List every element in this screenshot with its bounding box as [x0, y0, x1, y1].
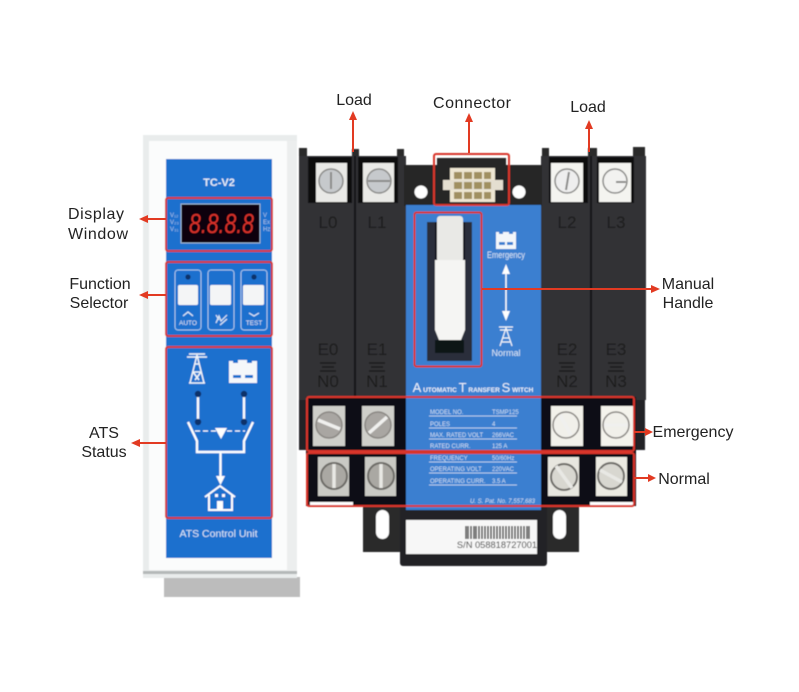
specification table: 50/60Hz: [492, 456, 514, 462]
callout: manual handle: Manual: [662, 276, 714, 293]
handle slot: [427, 216, 472, 361]
display window: 8.8.8.8: [189, 208, 254, 239]
transfer switch body: [299, 147, 646, 566]
connector housing: [404, 158, 542, 206]
barcode: [466, 526, 529, 539]
callout: manual handle: Handle: [663, 295, 713, 312]
specification table: FREQUENCY: [430, 456, 468, 462]
right terminal columns: [541, 147, 646, 450]
handle legend: Normal: [491, 348, 521, 358]
display window: Ex: [263, 220, 270, 226]
specification table: 266VAC: [492, 433, 515, 439]
mounting plate: [363, 500, 579, 566]
display window: V₂₃: [170, 220, 179, 226]
callout: normal: Normal: [658, 471, 710, 488]
specification table: RATED CURR.: [430, 444, 471, 450]
control unit: [143, 135, 300, 597]
specification table: 4: [492, 422, 496, 428]
display window: [170, 204, 270, 243]
terminal screws normal row: [318, 457, 627, 496]
callout: connector: [433, 95, 512, 153]
specification table: 220VAC: [492, 467, 515, 473]
column markings: N0: [317, 372, 339, 391]
ATS status diagram: [187, 354, 257, 510]
column markings: E1: [367, 340, 387, 359]
callout: emergency: Emergency: [653, 424, 733, 441]
function selector buttons: [175, 270, 267, 330]
mounting tray: [164, 577, 300, 597]
blue nameplate: [406, 205, 541, 510]
callout: manual handle: [482, 276, 714, 312]
specification table: OPERATING VOLT: [430, 467, 482, 473]
switch lines: [188, 391, 253, 485]
column markings: L3: [607, 213, 625, 232]
column markings: E0: [318, 340, 338, 359]
specification table: TSMP125: [492, 410, 519, 416]
callout: ATS status: ATS: [89, 425, 119, 442]
arrow: double headed: [505, 268, 507, 316]
unit caption: ATS Control Unit: [180, 528, 258, 540]
specification table: MODEL NO.: [430, 410, 464, 416]
callout: display window: [68, 206, 166, 243]
specification table: 3.5 A: [492, 479, 506, 485]
callout: load left: Load: [336, 92, 372, 109]
icon: transmission tower: [187, 354, 207, 383]
column markings: N3: [605, 372, 627, 391]
specification table: OPERATING CURR.: [430, 479, 486, 485]
callout: normal: [634, 471, 710, 488]
blue face: [166, 159, 272, 558]
handle legend: [487, 232, 525, 358]
callout: connector: Connector: [433, 95, 512, 112]
callout: ATS status: Status: [81, 444, 127, 461]
handle: [435, 216, 465, 340]
handle legend: Emergency: [487, 250, 525, 260]
serial label: S/N 058818727001: [457, 540, 537, 550]
column markings: L1: [368, 213, 386, 232]
callout: function selector: Function: [69, 276, 131, 293]
unit housing: [143, 135, 297, 578]
terminal screws top: [316, 163, 631, 202]
callout: load right: Load: [570, 99, 606, 116]
column markings: E3: [606, 340, 626, 359]
terminal screws emergency row: [313, 406, 633, 446]
callout: display window: Display: [68, 206, 124, 223]
column markings: L0: [319, 213, 337, 232]
specification table: POLES: [430, 422, 450, 428]
nameplate title: A UTOMATIC T RANSFER S WITCH: [413, 380, 534, 395]
specification table: [429, 410, 536, 505]
serial label: [406, 520, 537, 554]
button: test: TEST: [246, 320, 262, 327]
callout: load right: [570, 99, 606, 152]
icon: tower small: [499, 327, 513, 346]
button: manual: [208, 270, 234, 330]
specification table: U. S. Pat. No. 7,557,683: [470, 499, 536, 505]
display window: Hz: [263, 227, 270, 233]
display window: V: [263, 213, 267, 219]
column markings: [317, 213, 627, 391]
callout: display window: Window: [68, 226, 128, 243]
display window: V₃₁: [170, 227, 178, 233]
column markings: L2: [558, 213, 576, 232]
button: auto: AUTO: [179, 320, 197, 327]
highlight boxes: [166, 198, 272, 518]
terminal block rows: [306, 397, 636, 506]
callout: function selector: [69, 276, 166, 312]
specification table: 125 A: [492, 444, 507, 450]
column markings: N1: [366, 372, 388, 391]
icon: generator small: [496, 232, 516, 249]
specification table: MAX. RATED VOLT: [430, 433, 483, 439]
callout: ATS status: [81, 425, 166, 461]
display window: V₁₂: [170, 213, 179, 219]
callout: load left: [336, 92, 372, 152]
icon: generator: [229, 360, 257, 383]
icon: house: [205, 486, 235, 510]
model title: TC-V2: [203, 177, 235, 189]
column markings: N2: [556, 372, 578, 391]
highlight boxes: [307, 154, 634, 506]
callout: function selector: Selector: [70, 295, 129, 312]
left terminal columns: [299, 148, 406, 450]
column markings: E2: [557, 340, 577, 359]
